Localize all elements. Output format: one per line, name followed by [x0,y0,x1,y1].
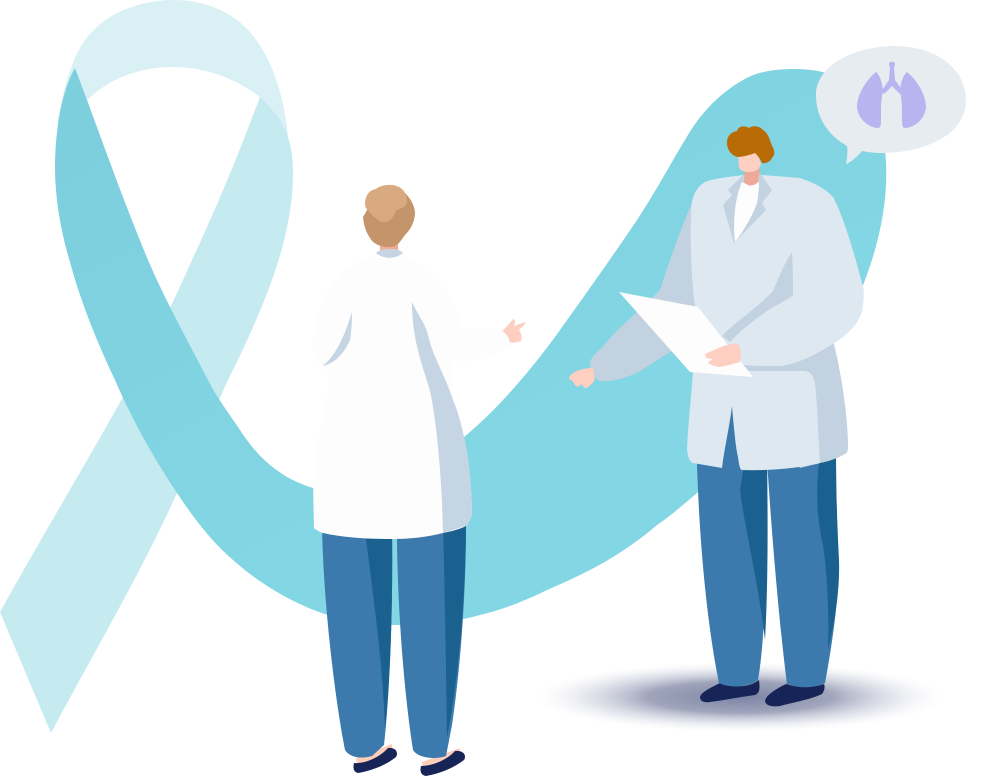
right doctor: face [738,150,761,172]
right doctor: shirt [734,182,759,242]
ribbon: top loop [57,0,288,137]
doctor: right, holding clipboard [569,126,864,706]
floor shadow [535,662,945,732]
right doctor: trousers [696,400,839,687]
left doctor: neck and collar [376,240,403,258]
right doctor: far hand [569,367,595,388]
speech bubble [816,46,966,164]
left doctor: hand [501,319,525,343]
right doctor: clipboard [619,292,753,377]
right doctor: neck [744,168,760,185]
bubble shape [816,46,966,164]
left doctor: sleeve shadow [322,312,352,366]
right doctor: chest and near arm [691,175,864,375]
left doctor: white coat [313,255,510,539]
left doctor: shoes [353,744,465,776]
right doctor: lower coat [687,371,820,470]
right doctor: back coat shadow [740,340,848,468]
right doctor: hair [727,126,774,163]
ribbon: main teal band [55,68,886,625]
right doctor: lapels [723,173,772,243]
right doctor: far arm sleeve [590,203,700,381]
right doctor: near hand [705,344,741,367]
ribbon: light back tail [0,97,293,733]
icon: lungs [857,62,926,128]
left doctor: coat shadow [412,302,472,533]
right doctor: shoes [700,680,825,706]
doctor: left, seen from behind [313,185,525,776]
left doctor: hair [363,185,415,247]
left doctor: trousers [322,520,466,758]
right doctor: arm crease [722,252,793,342]
